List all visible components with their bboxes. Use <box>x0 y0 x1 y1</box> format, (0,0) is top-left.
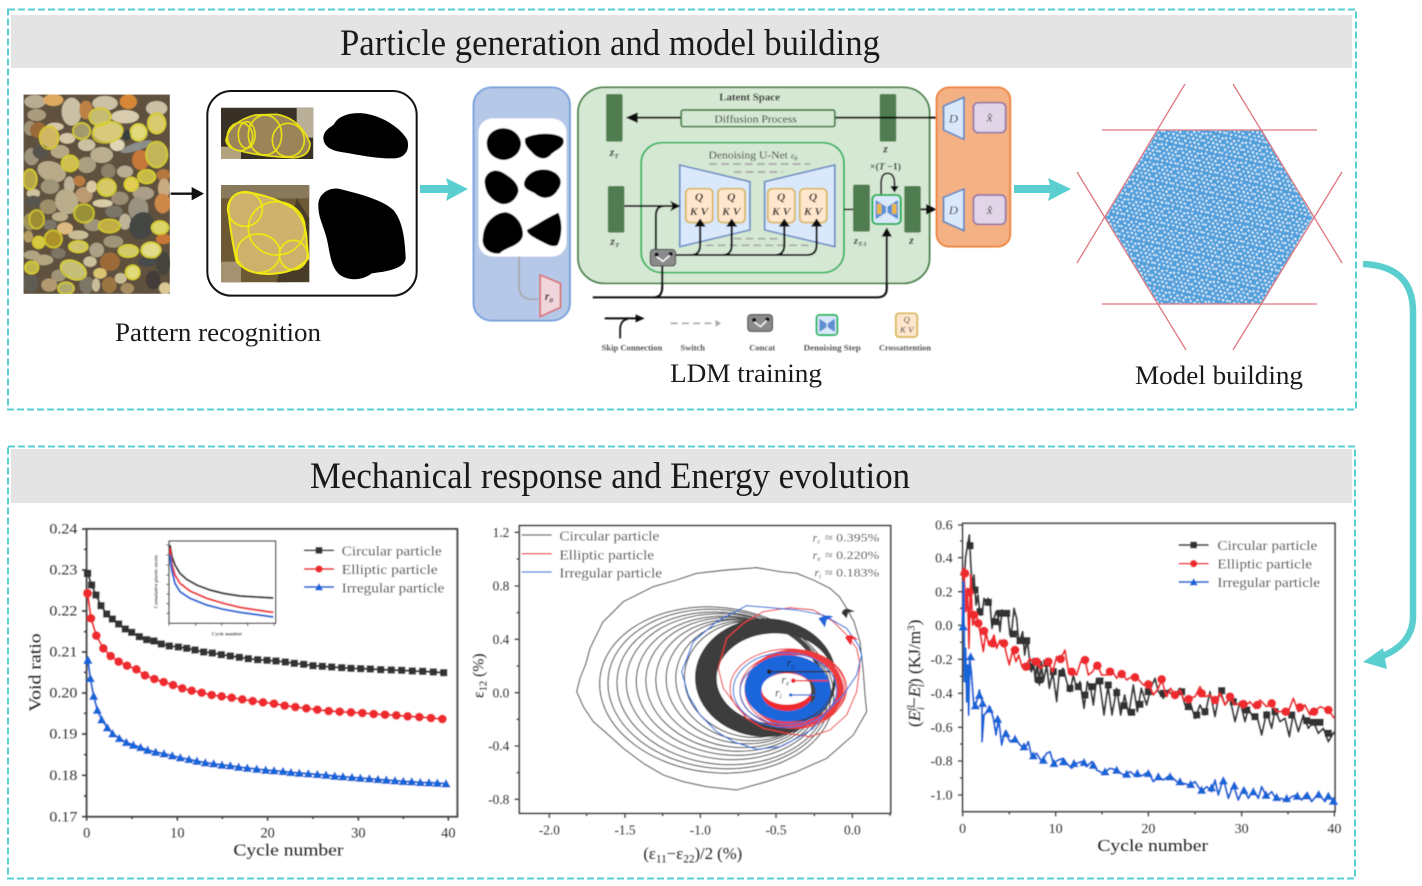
axes: 0.4 <box>493 632 510 647</box>
axes: 0 <box>83 826 90 842</box>
axes: 11 <box>656 853 667 865</box>
radius values: e <box>817 554 821 563</box>
axes: i <box>916 684 927 687</box>
axes: 22 <box>683 853 695 865</box>
crossattention blocks: K V <box>689 206 710 218</box>
axes: 10 <box>170 826 184 842</box>
panel: decoder: x̂ <box>986 203 993 217</box>
arrow: to model building <box>1014 178 1071 201</box>
axes: 0.19 <box>49 727 77 743</box>
radius markers: r <box>781 672 786 686</box>
radius markers: i <box>780 692 782 701</box>
arrow: photo to particles <box>171 187 204 200</box>
radius values: ≈ 0.183% <box>825 565 879 579</box>
series: irregular loops <box>682 606 862 749</box>
axes: 3 <box>907 625 918 631</box>
axes: -0.8 <box>488 792 510 807</box>
model building hexagon <box>1077 84 1342 350</box>
image: annotated particle bottom <box>221 185 309 282</box>
axes: 0 <box>959 822 966 837</box>
image: annotated particle top <box>221 108 313 159</box>
legend: Elliptic particle <box>1217 557 1312 572</box>
axes: 0.17 <box>49 809 77 825</box>
axes: -1.0 <box>931 789 953 804</box>
axes: 0.22 <box>49 604 77 620</box>
legend: Crossattention <box>879 343 931 353</box>
series: circular <box>88 573 444 673</box>
axes: 30 <box>1235 822 1249 837</box>
panel: extracted particle examples <box>207 91 417 296</box>
radius markers: e <box>786 678 790 687</box>
axes: -0.8 <box>931 755 953 770</box>
axes: 0.2 <box>935 585 953 600</box>
axes: -0.4 <box>488 739 510 754</box>
legend: Elliptic particle <box>342 562 438 577</box>
series: circular loops <box>577 568 867 790</box>
panel: denoising U-Net <box>624 143 844 273</box>
crossattention blocks: K V <box>771 206 792 218</box>
series: elliptic <box>963 568 1334 718</box>
axes: 0.23 <box>49 563 77 579</box>
series: circular <box>963 535 1334 742</box>
legend: Elliptic particle <box>559 547 654 562</box>
direction arrowheads <box>818 609 858 646</box>
legend: Skip Connection <box>602 343 662 353</box>
radius values: r <box>813 548 817 562</box>
axes: ) <box>905 619 924 625</box>
arrow: flow to mechanical response <box>1363 264 1413 669</box>
legend: Denoising Step <box>804 343 861 353</box>
panel: decoder: x̂ <box>986 111 993 125</box>
axes: 10 <box>1049 822 1063 837</box>
panel: conditioning input: r <box>545 290 549 303</box>
heading: particle generation bar <box>11 15 1352 68</box>
panel: latent space: ×(T −1) <box>870 162 901 172</box>
radius values: ≈ 0.220% <box>825 548 879 562</box>
legend: Irregular particle <box>559 566 662 581</box>
panel: latent space <box>578 87 943 297</box>
silhouette: bottom particle <box>318 189 406 279</box>
inset chart: Cycle number <box>212 632 243 638</box>
axes: 0.0 <box>844 822 861 837</box>
axes: (E <box>905 711 924 727</box>
denoising step icon <box>872 195 901 224</box>
axes <box>26 522 457 860</box>
inset chart <box>153 541 276 638</box>
crossattention blocks <box>686 189 827 223</box>
axes: − <box>905 697 924 707</box>
panel: latent space: Diffusion Process <box>714 114 797 126</box>
silhouette: top particle <box>323 113 408 158</box>
panel: latent space: z <box>610 235 615 248</box>
panel: denoising U-Net: Denoising U-Net ε <box>709 150 794 161</box>
radius values: r <box>813 531 817 545</box>
axes: 0.0 <box>935 619 953 634</box>
axes: -0.5 <box>765 822 787 837</box>
crossattention blocks: K V <box>721 206 742 218</box>
legend: Circular particle <box>1217 538 1317 553</box>
panel: latent space: z <box>882 143 888 156</box>
panel: latent space: T-1 <box>858 242 867 248</box>
legend <box>522 529 662 581</box>
axes: 40 <box>441 826 455 842</box>
axes: -2.0 <box>539 822 560 837</box>
axes: Void ratio <box>26 633 45 712</box>
pattern recognition section <box>23 91 417 296</box>
panel: latent space: z <box>854 235 858 247</box>
panel: decoder: D <box>948 203 958 217</box>
axes: ) (KJ/m <box>905 630 924 684</box>
inset chart: Cumulative plastic strain <box>153 555 159 608</box>
axes: 0.24 <box>49 522 77 538</box>
radius values: c <box>817 537 821 546</box>
radius values <box>813 531 879 580</box>
axes: 0.21 <box>49 645 77 661</box>
axes: 0.18 <box>49 768 77 784</box>
series: elliptic <box>88 593 442 719</box>
axes: ε <box>470 691 487 698</box>
axes: β <box>907 705 918 712</box>
axes: 0.6 <box>935 519 953 534</box>
axes: -1.0 <box>690 822 711 837</box>
legend: Irregular particle <box>342 580 444 595</box>
legend: Circular particle <box>559 529 659 544</box>
panel: latent space: T <box>615 242 620 249</box>
axes: 0.20 <box>49 686 77 702</box>
legend <box>1179 538 1320 590</box>
chart: void ratio <box>26 522 457 860</box>
axes: )/2 (%) <box>695 844 742 863</box>
legend <box>304 543 444 595</box>
panel: mechanical response frame <box>8 446 1355 878</box>
heading: mechanical response bar: Mechanical response and Energy evolution <box>310 456 910 497</box>
panel: decoder: D <box>948 112 958 126</box>
axes: (%) <box>470 653 487 681</box>
axes: -1.5 <box>614 822 636 837</box>
series: irregular <box>88 660 446 784</box>
radius values: i <box>819 571 821 580</box>
LDM training diagram <box>474 87 1010 353</box>
axes: 0.4 <box>935 551 953 566</box>
axes: γ <box>907 682 918 687</box>
axes: 0.0 <box>493 685 510 700</box>
panel: latent space: z <box>610 146 614 159</box>
axes: -0.2 <box>931 653 953 668</box>
radius markers: r <box>787 656 791 670</box>
axes: −ε <box>667 844 683 863</box>
legend <box>602 313 931 353</box>
crossattention blocks: Q <box>777 192 785 204</box>
axes: 20 <box>1141 822 1155 837</box>
legend: Concat <box>749 343 775 353</box>
panel: particle generation frame <box>8 10 1356 410</box>
radius values: ≈ 0.395% <box>825 531 879 545</box>
axes: Cycle number <box>1097 836 1208 855</box>
radius markers: r <box>775 686 780 700</box>
axes: i <box>916 707 927 710</box>
axes: 30 <box>351 826 365 842</box>
crossattention blocks: Q <box>727 192 736 204</box>
radius markers <box>767 656 831 701</box>
crossattention blocks: Q <box>695 192 703 204</box>
chart: energy evolution <box>905 519 1341 855</box>
image: pebble photo <box>23 94 171 295</box>
chart: stress strain loops <box>470 525 891 865</box>
legend: Q <box>904 315 911 325</box>
crossattention blocks: K V <box>803 206 824 218</box>
axes: -0.6 <box>931 721 953 736</box>
panel: conditioning input <box>474 87 570 321</box>
axes: 12 <box>479 681 490 691</box>
panel: denoising U-Net: θ <box>794 156 797 162</box>
radius markers: c <box>791 662 795 671</box>
label: LDM training: LDM training <box>670 358 822 388</box>
series: irregular <box>963 582 1334 802</box>
legend: Circular particle <box>342 543 442 558</box>
arrow: to LDM <box>420 178 468 201</box>
axes: E <box>905 686 924 698</box>
axes: -0.4 <box>931 687 953 702</box>
legend: K V <box>899 325 915 335</box>
legend: Irregular particle <box>1217 575 1320 590</box>
panel: latent space: Latent Space <box>719 93 780 104</box>
concat connections <box>624 206 817 255</box>
axes: 20 <box>261 826 275 842</box>
panel: latent space: T <box>614 153 619 160</box>
panel: decoder <box>937 87 1010 247</box>
panel: conditioning input: θ <box>549 298 553 305</box>
heading: particle generation bar: Particle generation and model building <box>340 23 880 64</box>
axes: (ε <box>643 844 656 863</box>
axes: Cycle number <box>233 841 344 860</box>
axes: 0.8 <box>493 579 510 594</box>
label: pattern recognition: Pattern recognition <box>115 317 321 347</box>
panel: latent space: z <box>908 234 914 247</box>
label: model building: Model building <box>1135 360 1303 390</box>
radius values: r <box>814 565 819 579</box>
axes <box>905 519 1341 855</box>
axes <box>470 525 891 865</box>
crossattention blocks: Q <box>809 192 817 204</box>
heading: mechanical response bar <box>11 449 1352 503</box>
series: elliptic loops <box>718 608 860 737</box>
legend: Switch <box>680 343 705 353</box>
axes: 1.2 <box>493 525 509 540</box>
axes: 40 <box>1327 822 1341 837</box>
